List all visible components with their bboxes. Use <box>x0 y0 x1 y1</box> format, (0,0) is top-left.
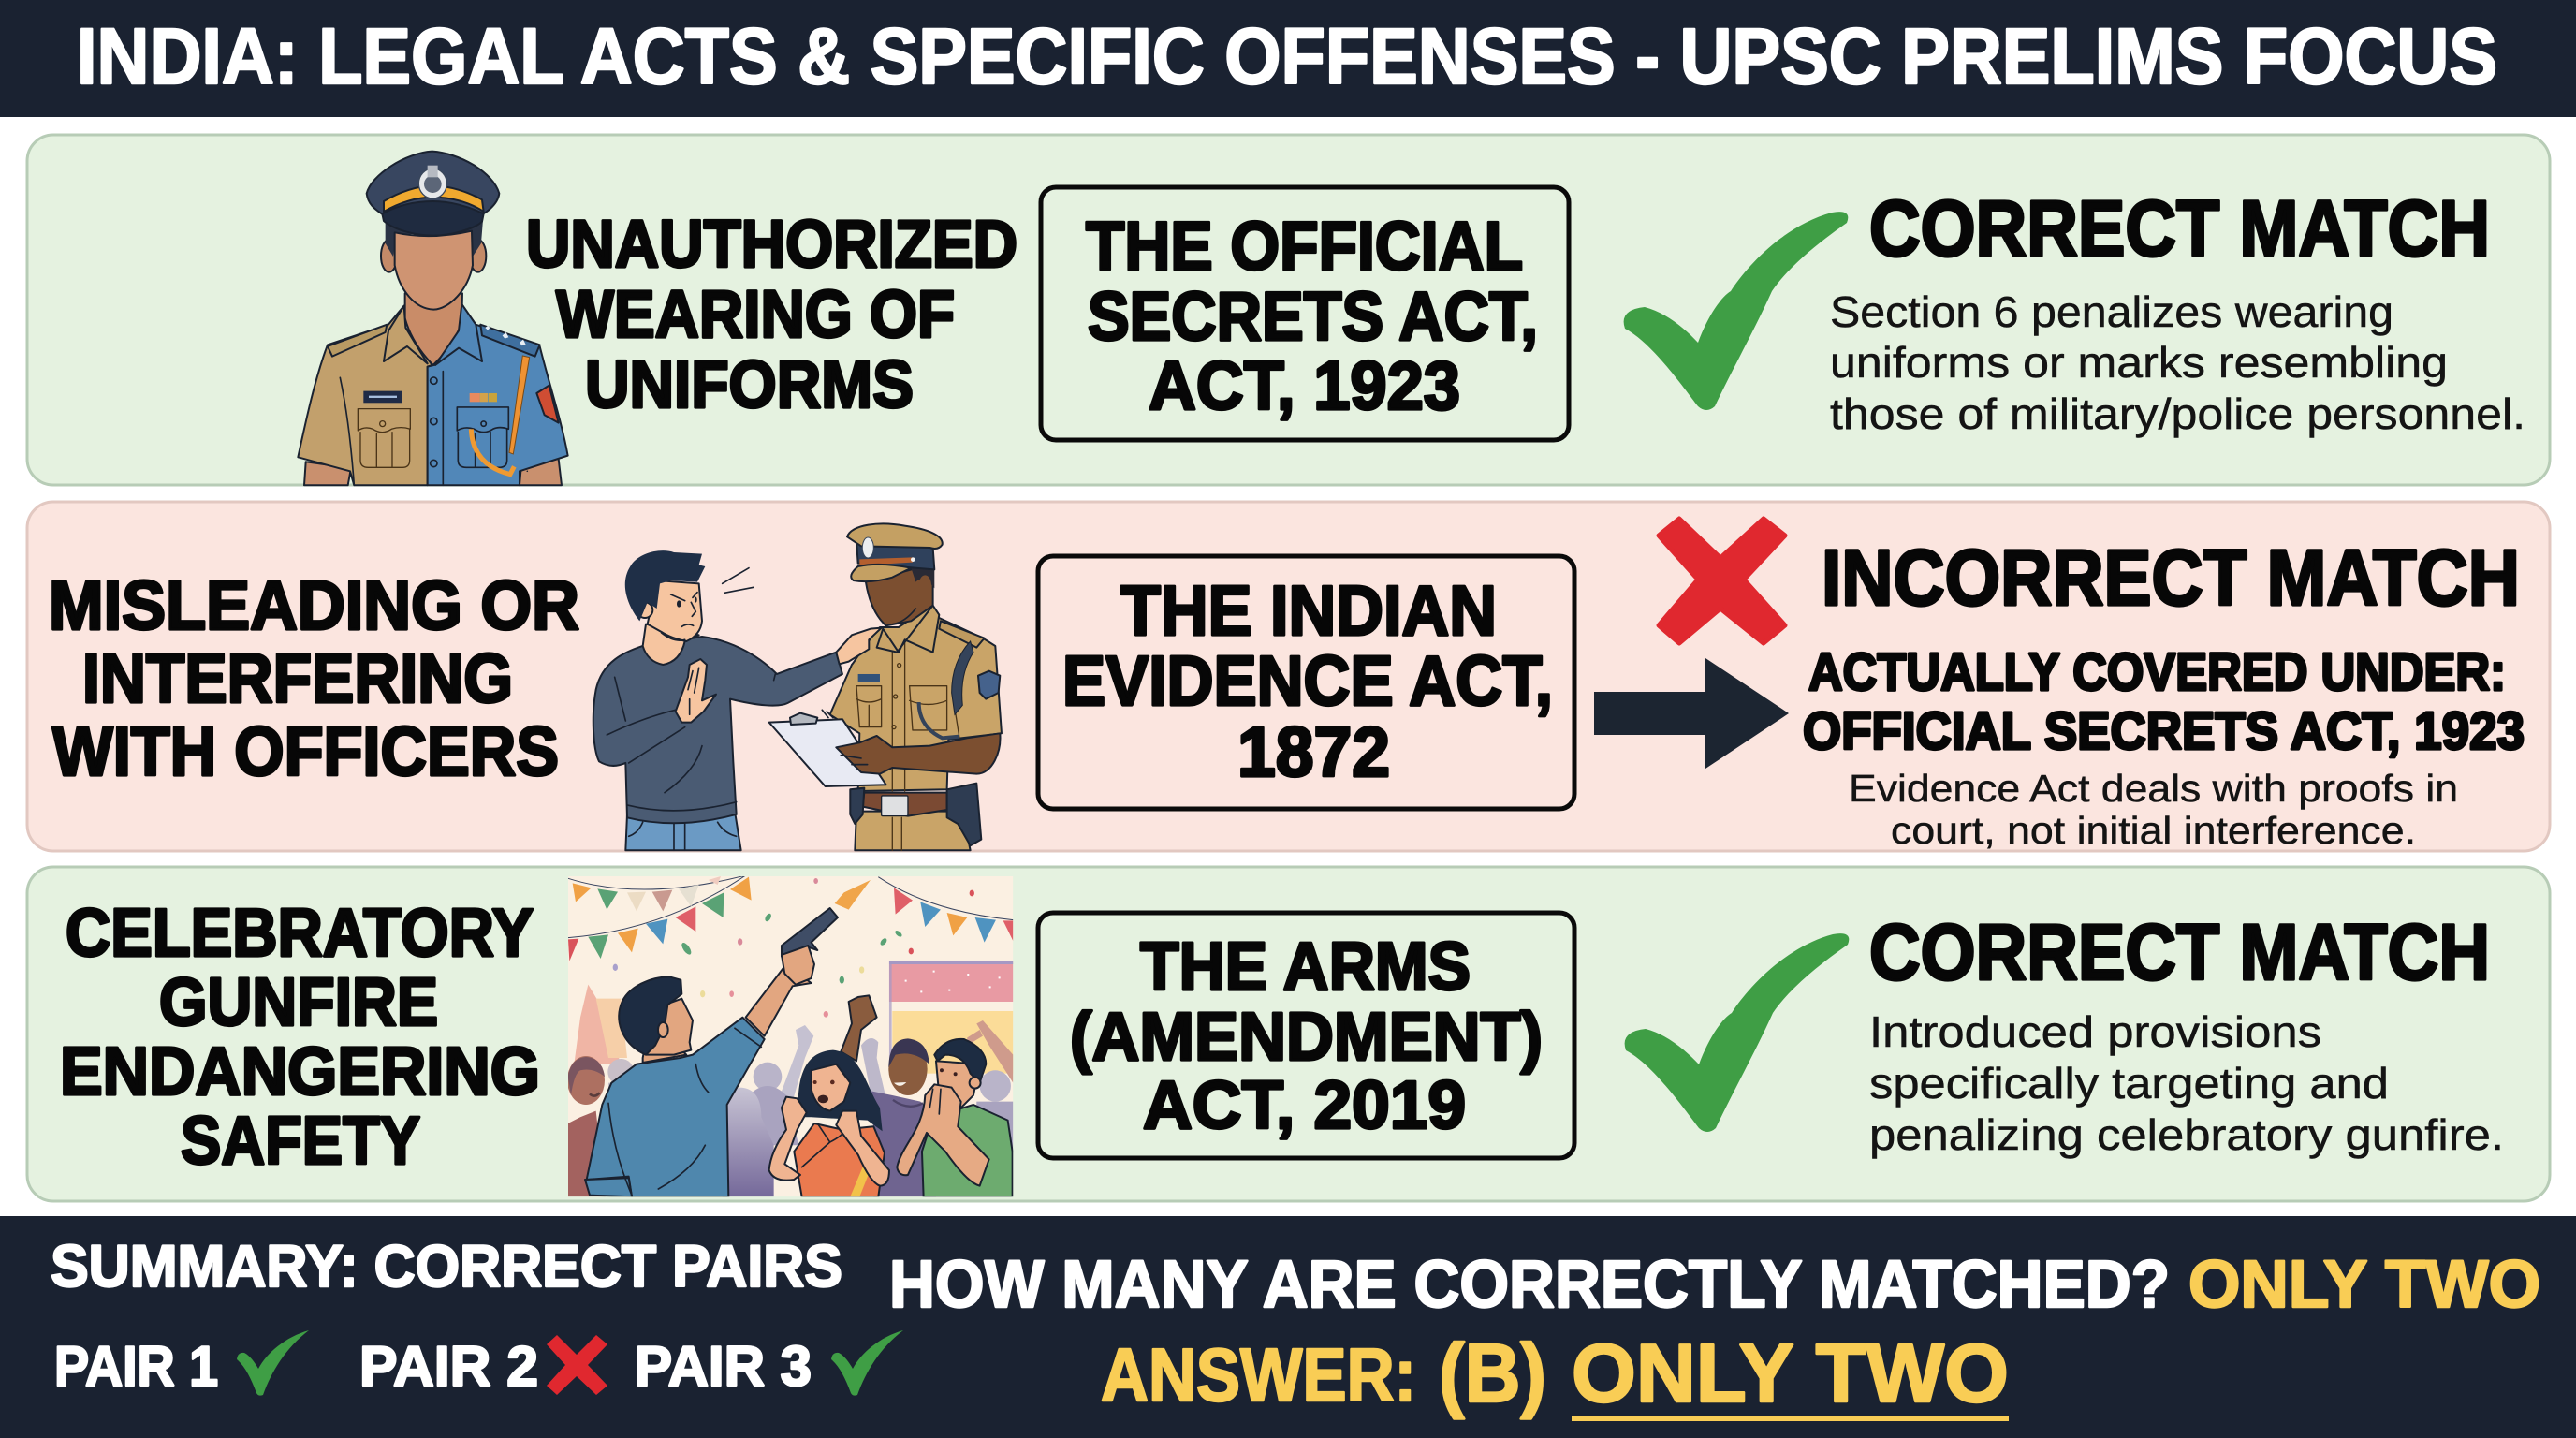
belt and holsters <box>863 793 947 816</box>
act box 3: ACT, 2019 <box>1143 1068 1466 1143</box>
officer forearm and hand <box>836 733 1000 774</box>
act box 1: SECRETS ACT, <box>1088 279 1538 355</box>
act box 1: ACT, 1923 <box>1149 348 1460 424</box>
explanation 3 <box>1869 1007 2504 1159</box>
explanation 1 <box>1830 287 2525 438</box>
act box 1 <box>1041 187 1569 440</box>
muzzle flash <box>835 880 871 910</box>
stall canopy <box>889 961 1013 1074</box>
clipboard <box>769 719 886 786</box>
explanation 3: Introduced provisions <box>1869 1007 2321 1056</box>
act box 3: (AMENDMENT) <box>1070 1000 1543 1075</box>
icon: green check 1 <box>1624 212 1848 410</box>
arrow <box>1594 658 1789 769</box>
illustration: celebratory gunfire scene <box>567 875 1013 1196</box>
offense label 1: UNAUTHORIZED <box>526 208 1017 282</box>
explanation 1: uniforms or marks resembling <box>1830 338 2448 387</box>
act box 2: THE INDIAN <box>1120 571 1497 650</box>
actual act: OFFICIAL SECRETS ACT, 1923 <box>1803 701 2525 761</box>
offense label 3: GUNFIRE <box>159 965 438 1040</box>
shooter <box>585 908 838 1196</box>
verdict 1: CORRECT MATCH <box>1869 184 2490 272</box>
explanation 3: specifically targeting and <box>1869 1059 2389 1108</box>
summary heading: SUMMARY: CORRECT PAIRS <box>51 1234 842 1299</box>
verdict 3: CORRECT MATCH <box>1869 908 2490 996</box>
pair 1 status: PAIR 1 <box>54 1335 218 1398</box>
man jeans <box>625 812 741 850</box>
offense label 1: WEARING OF <box>556 278 955 352</box>
offense label 1 <box>526 208 1017 422</box>
panel: pair 1 uniforms <box>27 135 2550 485</box>
blurred background crowd <box>567 985 1013 1196</box>
icon: split uniform officer <box>298 152 568 485</box>
pair 3 status: PAIR 3 <box>635 1335 812 1398</box>
act box 2 <box>1038 556 1574 809</box>
act box 3 <box>1038 913 1574 1158</box>
offense label 3 <box>60 896 540 1179</box>
answer <box>1101 1327 2009 1421</box>
actual act: ACTUALLY COVERED UNDER: <box>1808 642 2506 702</box>
question: HOW MANY ARE CORRECTLY MATCHED? <box>889 1248 2170 1322</box>
icon: red cross <box>1659 519 1785 643</box>
explanation 2: court, not initial interference. <box>1891 809 2416 852</box>
answer: ONLY TWO <box>1572 1327 2009 1419</box>
pair 2 status: PAIR 2 <box>359 1335 538 1398</box>
man sweater <box>593 637 842 823</box>
panel: pair 3 celebratory gunfire <box>27 867 2550 1201</box>
offense label 3: CELEBRATORY <box>66 896 534 971</box>
act box 2: EVIDENCE ACT, <box>1062 641 1553 720</box>
pair 1 status <box>54 1330 309 1398</box>
panel: pair 2 interference <box>27 502 2550 852</box>
explanation 2 <box>1849 767 2458 852</box>
background man purple shirt <box>841 995 939 1196</box>
explanation 1: those of military/police personnel. <box>1830 389 2525 438</box>
question: ONLY TWO <box>2188 1248 2540 1322</box>
act box 3: THE ARMS <box>1140 930 1471 1005</box>
offense label 2: MISLEADING OR <box>49 566 579 644</box>
bunting strings <box>568 875 1013 961</box>
offense label 2: INTERFERING <box>82 639 513 717</box>
confetti <box>613 878 974 1018</box>
offense label 2 <box>49 566 579 790</box>
man in green shirt <box>897 1039 1013 1196</box>
icon: man confronting officer <box>593 523 1002 850</box>
officer shirt <box>830 606 1002 791</box>
header bar <box>0 0 2576 117</box>
offense label 3: SAFETY <box>181 1104 420 1179</box>
offense label 1: UNIFORMS <box>585 348 914 422</box>
icon: green check 3 <box>1625 933 1849 1132</box>
woman in sari <box>769 1050 889 1196</box>
answer: ANSWER: <box>1101 1333 1416 1416</box>
footer bar <box>0 1216 2576 1438</box>
offense label 3: ENDANGERING <box>60 1034 540 1109</box>
actual act <box>1803 642 2525 761</box>
answer: (B) <box>1439 1327 1546 1419</box>
verdict 2: INCORRECT MATCH <box>1822 534 2520 622</box>
man hand on shoulder <box>836 628 882 664</box>
act box 2: 1872 <box>1237 712 1390 791</box>
offense label 2: WITH OFFICERS <box>52 712 559 790</box>
explanation 2: Evidence Act deals with proofs in <box>1849 767 2458 810</box>
officer trousers <box>855 812 971 850</box>
act box 1: THE OFFICIAL <box>1086 209 1523 285</box>
pair 3 status <box>635 1330 903 1398</box>
explanation 1: Section 6 penalizes wearing <box>1830 287 2393 336</box>
explanation 3: penalizing celebratory gunfire. <box>1869 1110 2504 1159</box>
